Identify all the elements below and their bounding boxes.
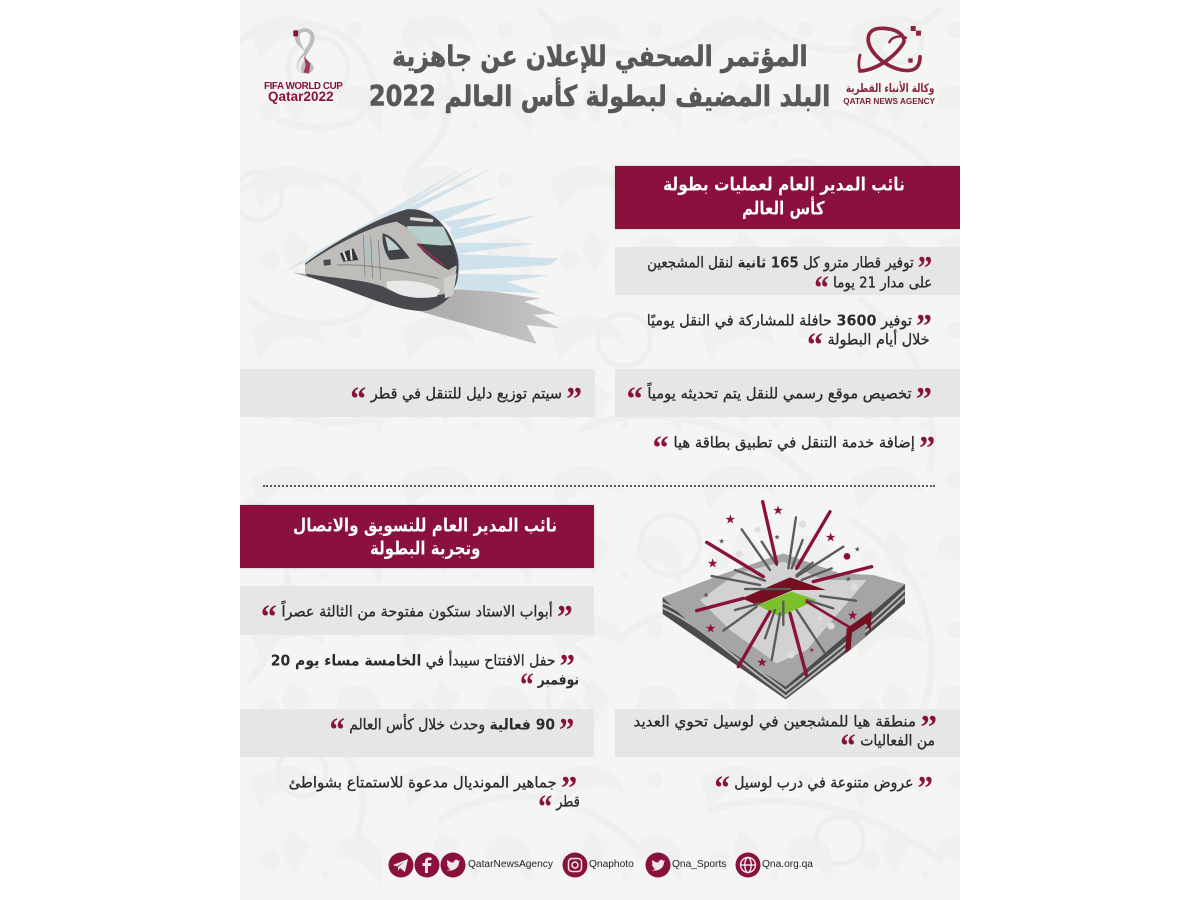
bullet: hayya zone lusail: ”منطقة هيا للمشجعين في لوسيل تحوي العديد xyxy=(633,708,937,746)
icon: QNA emblem xyxy=(858,26,922,73)
header: operations deputy xyxy=(615,166,960,229)
bullet: official transport site xyxy=(615,369,960,417)
header: marketing deputy xyxy=(240,505,594,568)
illustration: stadium: ★ xyxy=(718,537,725,546)
bullet: opening ceremony: نوفمبر “ xyxy=(520,666,579,704)
bullet: 3600 buses: خلال أيام البطولة “ xyxy=(807,326,930,364)
windshield xyxy=(407,226,452,247)
icon: instagram xyxy=(562,852,588,878)
agency name arabic: وكالة الأنباء القطرية xyxy=(846,82,934,96)
icon: globe xyxy=(736,852,760,878)
stars: ★ xyxy=(847,607,858,622)
bullet: hayya card service: ”إضافة خدمة التنقل في تطبيق بطاقة هيا “ xyxy=(652,429,935,467)
stars: ★ xyxy=(756,655,768,670)
bullet: hayya zone lusail xyxy=(615,709,960,757)
icon: world cup emblem xyxy=(293,28,314,74)
icon: telegram xyxy=(388,852,414,878)
stars: ★ xyxy=(705,620,716,635)
bullet: 3600 buses: ”توفير 3600 حافلة للمشاركة في النقل يوميًا xyxy=(647,307,932,345)
entrance gate xyxy=(845,611,872,653)
bullet: opening ceremony: ”حفل الافتتاح سيبدأ في الخامسة مساء يوم 20 xyxy=(271,647,575,685)
gray rays xyxy=(712,517,856,660)
bullet: transport guide: ”سيتم توزيع دليل للتنقل في قطر “ xyxy=(350,380,582,418)
bullet: transport guide xyxy=(240,369,595,417)
stars: ★ xyxy=(825,529,836,544)
title: البلد المضيف لبطولة كأس العالم 2022 xyxy=(368,80,830,114)
icon: twitter sports xyxy=(646,852,670,878)
stars: ★ xyxy=(772,502,784,517)
icon: twitter xyxy=(440,852,466,878)
bullet: stadium gates: ”أبواب الاستاد ستكون مفتوحة من الثالثة عصراً “ xyxy=(261,598,573,636)
header: operations deputy: نائب المدير العام لعمليات بطولة xyxy=(663,174,905,196)
bullet: 90 events xyxy=(240,709,594,757)
title xyxy=(368,40,830,114)
qatar 2022 text: Qatar2022 xyxy=(268,89,334,104)
bullet: beaches xyxy=(288,769,580,826)
handle: Qna.org.qa: Qna.org.qa xyxy=(762,859,813,870)
handle: Qnaphoto: Qnaphoto xyxy=(589,859,634,870)
footer: social links xyxy=(388,852,813,878)
maroon rays xyxy=(697,502,872,676)
stars: ★ xyxy=(707,555,718,570)
header: marketing deputy: وتجربة البطولة xyxy=(370,538,480,560)
gray shadow streak xyxy=(293,273,560,344)
title: المؤتمر الصحفي للإعلان عن جاهزية xyxy=(392,40,808,74)
header: marketing deputy: نائب المدير العام للتسويق والاتصال xyxy=(293,515,557,537)
stadium roof xyxy=(742,577,826,605)
bullet: official transport site: ”تخصيص موقع رسمي للنقل يتم تحديثه يومياً “ xyxy=(626,380,932,418)
stars: ★ xyxy=(725,511,736,526)
bullet: 3600 buses xyxy=(647,307,932,364)
illustration: metro train xyxy=(283,165,567,344)
logo: FIFA World Cup Qatar 2022 xyxy=(264,28,342,104)
bullet: metro every 165 seconds: على مدار 21 يوما “ xyxy=(814,269,932,307)
logo: Qatar News Agency xyxy=(843,26,935,106)
side windows xyxy=(382,233,410,260)
ground top surface xyxy=(663,553,905,687)
fifa text: FIFA WORLD CUP xyxy=(264,81,342,92)
bullet: beaches: قطر “ xyxy=(538,788,580,826)
bullet: lusail boulevard: ”عروض متنوعة في درب لوسيل “ xyxy=(714,769,933,807)
train body xyxy=(305,209,459,311)
stars xyxy=(705,502,858,670)
bullet: metro every 165 seconds xyxy=(615,247,960,295)
stars: ★ xyxy=(809,647,814,654)
illustration: stadium: ★ xyxy=(703,591,710,600)
illustration: stadium: ★ xyxy=(854,544,861,553)
illustration: stadium: ★ xyxy=(774,533,781,542)
icon: facebook xyxy=(414,852,440,878)
page background panel xyxy=(240,0,960,900)
agency name english: QATAR NEWS AGENCY xyxy=(843,97,935,106)
bullet: metro every 165 seconds: ”توفير قطار مترو كل 165 ثانية لنقل المشجعين xyxy=(647,249,932,287)
pitch xyxy=(757,592,817,617)
handle: QatarNewsAgency: QatarNewsAgency xyxy=(468,859,553,870)
illustration: stadium xyxy=(662,500,906,700)
bullet: beaches: ”جماهير المونديال مدعوة للاستمتاع بشواطئ xyxy=(288,769,577,807)
ground block sides xyxy=(663,584,905,699)
blue speed streaks xyxy=(282,164,568,320)
bullet: opening ceremony xyxy=(271,647,579,704)
handle: Qna_Sports: Qna_Sports xyxy=(672,859,726,870)
bullet: 90 events: ”90 فعالية وحدث خلال كأس العالم “ xyxy=(329,711,574,749)
bullet: stadium gates xyxy=(240,586,594,635)
bullet: hayya zone lusail: من الفعاليات “ xyxy=(840,727,935,765)
illustration: stadium: ★ xyxy=(845,575,852,584)
header: operations deputy: كأس العالم xyxy=(742,198,825,220)
